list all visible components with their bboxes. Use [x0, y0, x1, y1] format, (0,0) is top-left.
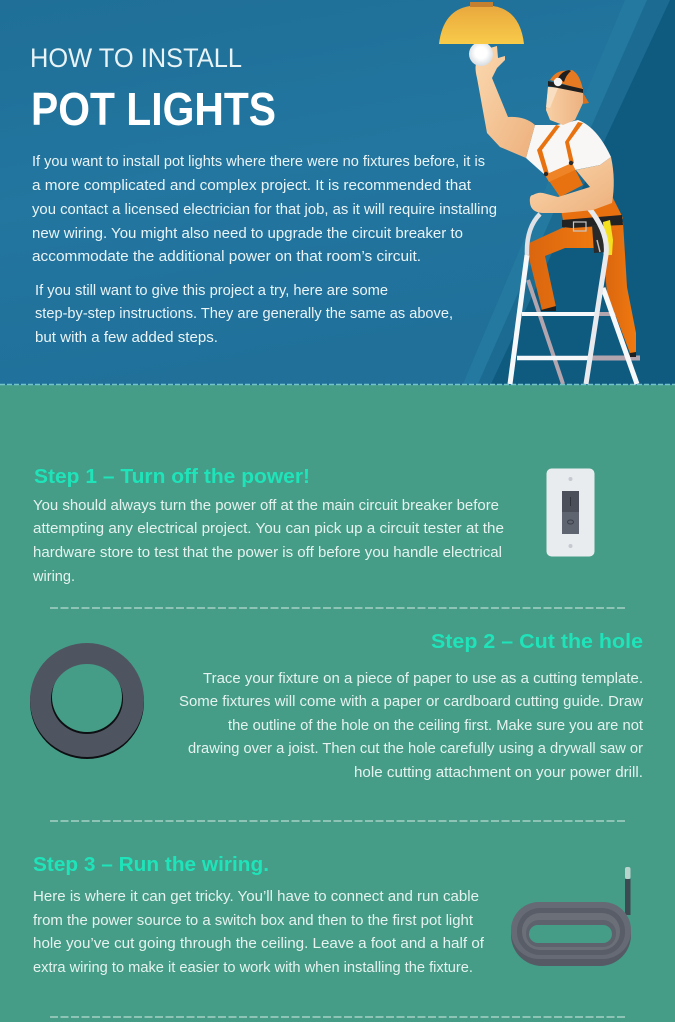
- standing leg: [603, 222, 636, 353]
- step 1 text: wiring.: [32, 569, 75, 585]
- ceiling lamp: [439, 2, 524, 66]
- illustration: electrician on ladder installing a light: [439, 2, 640, 384]
- intro paragraph: accommodate the additional power on that room’s circuit.: [32, 249, 421, 265]
- title: [30, 43, 276, 135]
- step 1 text: You should always turn the power off at the main circuit breaker before: [33, 498, 499, 514]
- shirt: [526, 120, 611, 185]
- step 2 text: Some fixtures will come with a paper or cardboard cutting guide. Draw: [179, 694, 644, 710]
- second intro paragraph: step-by-step instructions. They are generally the same as above,: [35, 306, 453, 322]
- raised arm: [476, 46, 535, 158]
- icon: coil of wire: [511, 867, 631, 966]
- step 3 text: extra wiring to make it easier to work with when installing the fixture.: [33, 960, 473, 976]
- step 3 heading: Step 3 – Run the wiring.: [33, 853, 269, 876]
- step 2 text: drawing over a joist. Then cut the hole carefully using a drywall saw or: [188, 741, 643, 757]
- step 1 heading: Step 1 – Turn off the power!: [34, 465, 310, 488]
- step 1 text: attempting any electrical project. You can pick up a circuit tester at the: [33, 521, 504, 537]
- head: [546, 87, 583, 125]
- overall bib and straps: [537, 122, 583, 197]
- second intro paragraph: If you still want to give this project a try, here are some: [35, 283, 388, 299]
- step 2 text: Trace your fixture on a piece of paper to use as a cutting template.: [203, 671, 643, 687]
- second intro paragraph: but with a few added steps.: [35, 330, 218, 346]
- title: HOW TO INSTALL: [30, 43, 242, 73]
- intro paragraph: If you want to install pot lights where there were no fixtures before, it is: [32, 154, 485, 170]
- icon: light switch: [546, 468, 594, 556]
- torso: [560, 198, 623, 230]
- intro paragraph: you contact a licensed electrician for that job, as it will require installing: [32, 202, 497, 218]
- step 3 text: Here is where it can get tricky. You’ll have to connect and run cable: [33, 889, 479, 905]
- intro paragraph: new wiring. You might also need to upgrade the circuit breaker to: [32, 226, 463, 242]
- header background panel: [0, 0, 675, 385]
- step 2 text: hole cutting attachment on your power drill.: [354, 765, 643, 781]
- dashed header divider: [0, 384, 675, 386]
- step 3 text: from the power source to a switch box and then to the first pot light: [33, 913, 473, 929]
- helmet with headlamp: [548, 70, 589, 104]
- step 2 text: the outline of the hole on the ceiling first. Make sure you are not: [228, 718, 643, 734]
- step 3 text: hole you’ve cut going through the ceiling. Leave a foot and a half of: [33, 936, 485, 952]
- raised leg: [527, 228, 596, 310]
- step 2 heading: Step 2 – Cut the hole: [431, 630, 643, 653]
- lower arm resting on ladder: [530, 157, 614, 213]
- step 3 text: [33, 889, 485, 976]
- green steps background panel: [0, 385, 675, 1022]
- tool belt: [562, 215, 623, 255]
- title: POT LIGHTS: [31, 83, 276, 135]
- intro paragraph: a more complicated and complex project. It is recommended that: [32, 178, 471, 194]
- step 2 text: [179, 671, 644, 781]
- ladder back legs and rungs: [528, 280, 640, 384]
- step 1 text: hardware store to test that the power is off before you handle electrical: [33, 545, 502, 561]
- second intro paragraph: [35, 283, 453, 346]
- icon: ring hole template: [30, 643, 144, 759]
- step 1 text: [32, 498, 504, 585]
- intro paragraph: [32, 154, 497, 265]
- ladder front: [510, 207, 637, 384]
